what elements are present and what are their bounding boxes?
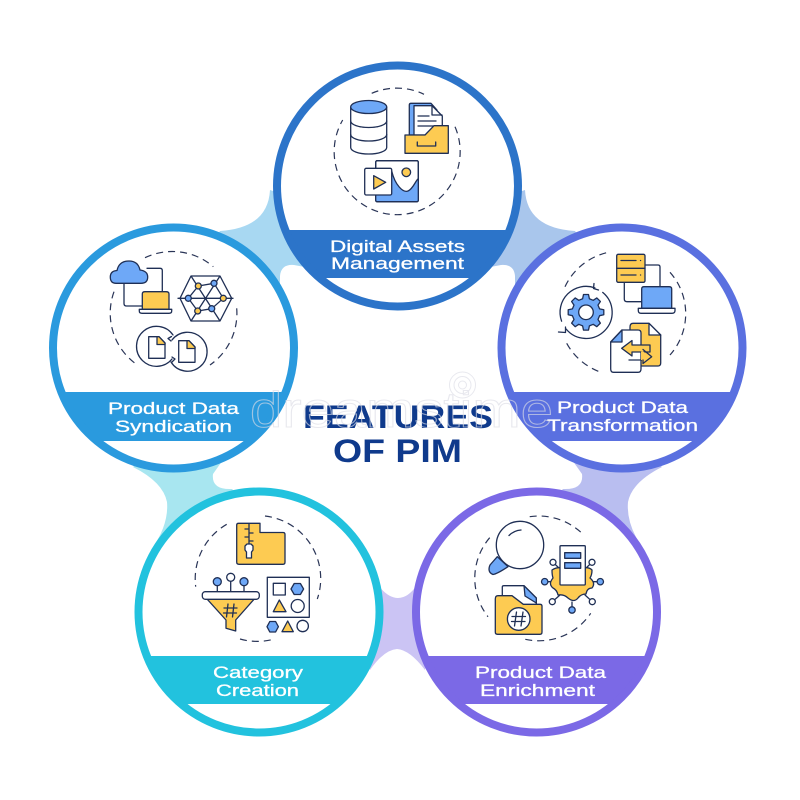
panel: category creation	[134, 492, 384, 732]
label text	[547, 398, 698, 435]
icon: network hexagon	[178, 276, 233, 321]
label text: Syndication	[115, 417, 232, 436]
icon: folder with document	[405, 103, 448, 153]
panel: product data syndication	[48, 228, 298, 468]
ring	[502, 228, 742, 468]
panel: digital assets management	[272, 66, 522, 306]
icon: data gear	[542, 546, 604, 613]
icon: funnel with hash	[202, 573, 259, 631]
ring	[53, 228, 294, 468]
icon: document exchange	[611, 323, 661, 372]
dashed circle	[110, 251, 237, 365]
connector: top to right	[465, 190, 595, 300]
label band	[428, 656, 644, 704]
label text	[213, 663, 304, 700]
icon: zip folder	[237, 523, 285, 564]
label text: Transformation	[547, 416, 698, 435]
label band	[66, 392, 282, 441]
icon: syncing documents	[137, 326, 207, 371]
dashed circle	[565, 252, 686, 373]
connector: left to bottom left	[133, 430, 243, 560]
icon: image and video	[365, 161, 418, 202]
icon: server and laptop	[617, 254, 675, 313]
icon: magnifier	[489, 521, 544, 574]
title: FEATURES	[303, 399, 493, 435]
title	[303, 399, 493, 469]
label text: Creation	[216, 681, 299, 700]
label band	[151, 656, 367, 704]
connector: right to bottom right	[552, 430, 662, 560]
panel: product data transformation	[497, 228, 747, 468]
label text: Product Data	[475, 663, 607, 682]
label text: Product Data	[108, 399, 240, 418]
icon: shapes board	[267, 577, 309, 632]
ring	[277, 66, 518, 306]
icon: gear with rotation arrows	[558, 284, 612, 338]
label text	[108, 399, 240, 436]
connector: bottom left to bottom right	[365, 585, 430, 670]
dashed circle	[334, 88, 460, 215]
title: OF PIM	[333, 433, 462, 469]
connector: top to left	[200, 190, 330, 300]
label text: Product Data	[557, 398, 689, 417]
icon: cloud and laptop	[110, 261, 172, 313]
ring	[416, 492, 657, 732]
label text	[330, 237, 465, 273]
label band	[290, 230, 506, 278]
icon: database	[351, 100, 387, 154]
watermark: dreamstime	[250, 382, 553, 438]
icon: hash folder	[495, 586, 542, 634]
ring	[138, 492, 380, 732]
label band	[514, 392, 730, 441]
dashed circle	[195, 516, 321, 641]
panel: product data enrichment	[412, 492, 662, 732]
dashed circle	[475, 516, 591, 641]
label text	[475, 663, 607, 700]
label text: Enrichment	[480, 681, 595, 700]
label text: Management	[331, 254, 464, 273]
label text: Digital Assets	[330, 237, 465, 256]
label text: Category	[213, 663, 304, 682]
